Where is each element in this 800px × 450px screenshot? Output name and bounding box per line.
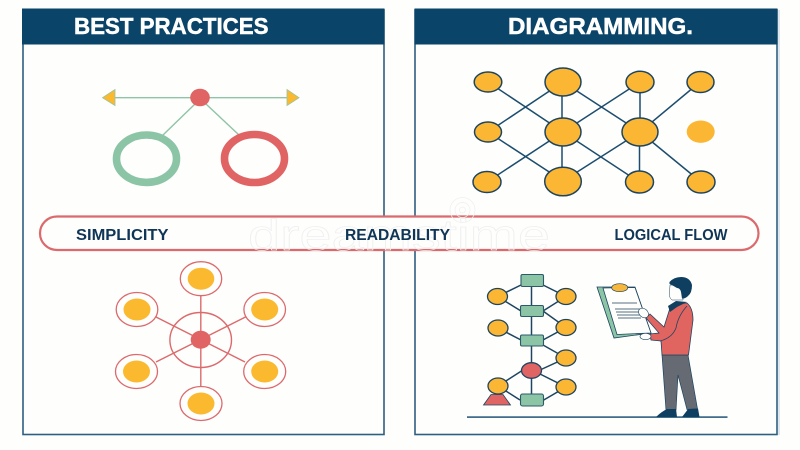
panel: best practices <box>22 8 384 434</box>
heading: diagramming: DIAGRAMMING. <box>508 13 693 39</box>
flowchart links <box>498 280 566 401</box>
panel frame: left <box>23 10 384 434</box>
clipboard text lines <box>612 303 641 318</box>
spokes <box>156 296 246 386</box>
upper hand <box>637 306 650 320</box>
red ring <box>224 134 284 182</box>
flowchart red node <box>522 363 542 378</box>
green ring <box>116 135 176 182</box>
clipboard <box>597 284 651 338</box>
unlinked yellow node <box>687 120 715 143</box>
hub centre <box>191 331 211 349</box>
hub ring <box>170 312 232 368</box>
connector lines <box>114 98 288 135</box>
legs <box>662 355 698 410</box>
header bar: left <box>22 8 384 44</box>
right edge shadow <box>778 10 780 435</box>
watermark text: dreamstime <box>248 211 550 260</box>
arrowhead: left <box>102 90 115 106</box>
torso and arms <box>646 303 693 355</box>
illustration: person holding clipboard <box>597 277 700 417</box>
lower hand <box>640 333 651 340</box>
clipboard sheet <box>603 288 651 334</box>
red triangle <box>484 394 510 405</box>
diagram: flowchart <box>484 274 576 406</box>
label: readability: READABILITY <box>345 227 451 244</box>
clipboard clip <box>612 284 628 292</box>
banner pill <box>40 216 758 250</box>
collar <box>668 301 687 312</box>
flowchart green boxes <box>520 274 544 406</box>
banner: three principles <box>40 198 758 260</box>
flowchart yellow nodes <box>488 288 576 395</box>
network links <box>487 82 701 182</box>
hair <box>670 277 692 299</box>
diagram: balanced branches <box>102 89 299 182</box>
panel frame: right <box>415 10 777 434</box>
watermark spiral <box>450 198 475 222</box>
header bar: right <box>414 8 778 44</box>
sleeve fold <box>660 306 687 341</box>
network nodes <box>473 68 715 196</box>
heading: best practices: BEST PRACTICES <box>74 13 268 39</box>
ground line <box>467 416 728 418</box>
watermark <box>248 198 550 260</box>
diagram: node network <box>473 68 715 196</box>
face <box>669 285 683 300</box>
clipboard backing <box>597 287 651 338</box>
panel: diagramming <box>414 8 780 435</box>
central red node <box>190 89 210 106</box>
diagram: hub and spoke <box>116 262 286 420</box>
label: simplicity: SIMPLICITY <box>76 227 169 244</box>
satellite nodes <box>116 262 286 420</box>
label: logical flow: LOGICAL FLOW <box>614 227 728 244</box>
satellite yellow centres <box>123 268 278 414</box>
shoes <box>656 408 700 417</box>
arrowhead: right <box>287 90 299 106</box>
